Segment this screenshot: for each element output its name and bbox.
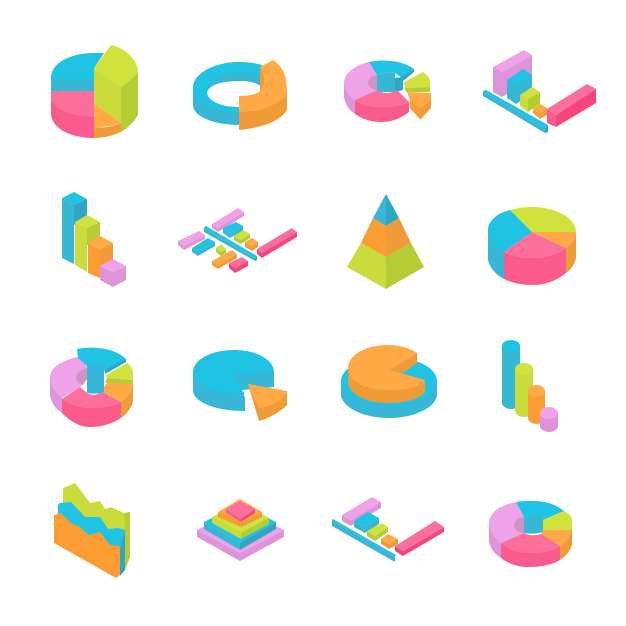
segment: orange: [541, 528, 572, 560]
icon: pie chart with detached orange slice: [193, 350, 287, 421]
bar: pink: [395, 521, 444, 556]
axis bar: [332, 519, 396, 562]
icon: stepped column chart: [62, 192, 126, 287]
cylinder: cyan: [502, 340, 520, 409]
icon: exploded donut chart: [344, 60, 431, 122]
cylinder: lilac: [540, 407, 558, 432]
base bar: [483, 90, 548, 133]
icon: donut chart with orange segment: [193, 60, 287, 130]
segment: cyan: [516, 501, 564, 534]
icon: layered pyramid: [347, 194, 424, 289]
pie body: cyan: [193, 350, 274, 411]
slice: pink: [51, 91, 94, 138]
slice: lime: [510, 207, 576, 232]
icon: orange pie on cyan disc: [341, 345, 437, 418]
slice: cyan: [488, 210, 532, 279]
bar: cyan: [507, 69, 532, 104]
segment: lilac: [50, 357, 90, 413]
icon: thick pie chart: [488, 207, 576, 285]
column: cyan: [62, 192, 87, 264]
icon: stepped square pyramid: [197, 499, 284, 561]
slice: cyan: [51, 53, 104, 92]
segment: pink: [355, 90, 409, 122]
segment: orange: [407, 92, 431, 120]
ring: cyan: [193, 62, 262, 125]
bar: orange: [381, 534, 398, 549]
cylinder: lime: [515, 363, 533, 417]
area: orange: [54, 513, 120, 578]
layer: orange: [218, 499, 262, 527]
bar: lime: [520, 87, 540, 112]
layer: lilac: [197, 508, 284, 561]
segment: pink: [501, 533, 560, 567]
layer: pink: [226, 501, 255, 522]
column: orange: [88, 236, 113, 278]
icon: layered area chart: [54, 483, 130, 578]
slice: lime: [94, 45, 138, 132]
bar: pink: [547, 84, 596, 127]
segment: lilac: [344, 62, 377, 114]
icon: thick donut chart: [489, 501, 572, 567]
layer: lime: [212, 502, 269, 539]
segment: lilac: [489, 502, 524, 558]
icon: two-sided isometric bar chart: [178, 208, 297, 273]
layer: orange middle: [361, 218, 411, 257]
layer: cyan tip: [373, 194, 399, 226]
column: lilac: [100, 259, 126, 287]
segment: cyan raised: [77, 348, 126, 394]
icon: isometric bar chart on axis: [332, 497, 444, 562]
icon: ring chart with raised cyan segment: [50, 348, 133, 427]
slice: orange: [532, 232, 576, 273]
segment: pink: [62, 387, 121, 427]
segment: lime: [105, 363, 133, 385]
icon: isometric bar chart with base: [483, 50, 596, 133]
icon: cylinder pie chart with raised lime slice: [51, 45, 138, 138]
segment: lime: [404, 72, 430, 92]
pie: orange: [348, 345, 425, 403]
column: lime: [75, 215, 100, 272]
upper bars: [212, 208, 297, 258]
bar: lime: [367, 523, 388, 541]
segment: orange: [102, 382, 133, 418]
cylinder: orange: [528, 385, 545, 424]
bar: lilac: [342, 497, 381, 526]
layer: cyan: [204, 504, 276, 550]
slice: orange: [94, 103, 121, 138]
lower bars: [178, 231, 248, 273]
segment: orange: [239, 60, 287, 130]
bar: cyan: [354, 512, 379, 533]
area: cyan: [58, 502, 125, 576]
segment: cyan: [369, 60, 414, 92]
area: lime: [63, 483, 130, 570]
layer: lime base: [347, 243, 424, 289]
axis bar: [204, 226, 257, 261]
icon: cylinder column chart: [502, 340, 558, 432]
slice: orange: [248, 384, 287, 421]
disc: cyan: [341, 357, 437, 418]
segment: lime: [543, 511, 572, 530]
slice: pink: [504, 232, 566, 285]
bar: orange: [533, 104, 547, 119]
bar: lilac: [493, 50, 532, 97]
